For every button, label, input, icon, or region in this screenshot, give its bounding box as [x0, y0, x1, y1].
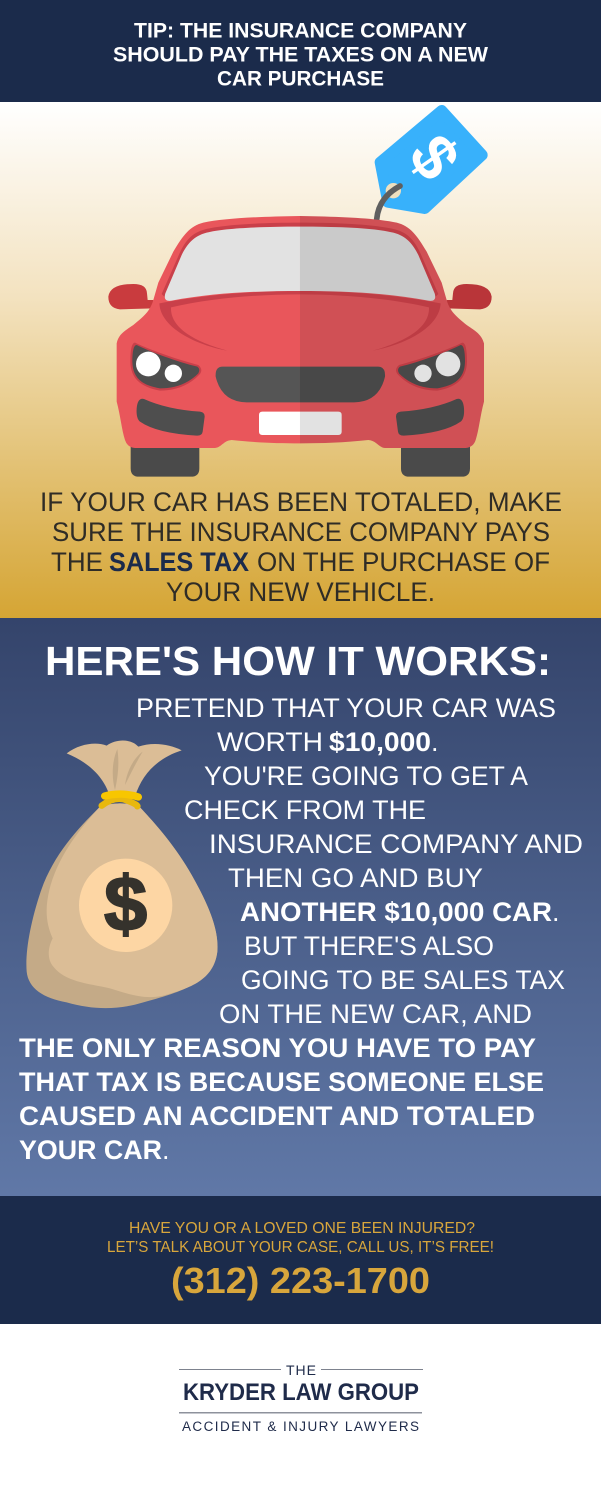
panel: sales tax tip	[0, 102, 601, 618]
icon: right wheel	[401, 443, 470, 477]
text block: sales tax tip	[40, 487, 562, 607]
right mirror	[447, 284, 492, 309]
text block: how it works explanation: .	[552, 897, 560, 927]
text block: how it works explanation: THEN GO AND BUY	[228, 863, 483, 893]
logo: The Kryder Law Group: ACCIDENT & INJURY LAWYERS	[182, 1419, 419, 1434]
left mirror	[108, 284, 153, 309]
text block: how it works explanation: CHECK FROM THE	[184, 795, 426, 825]
text block: how it works explanation: ON THE NEW CAR, AND	[219, 999, 532, 1029]
text block: how it works explanation: THE ONLY REASON YOU HAVE TO PAY	[19, 1033, 536, 1063]
panel: title banner	[0, 0, 601, 102]
text block: how it works explanation: THAT TAX IS BECAUSE SOMEONE ELSE	[19, 1067, 544, 1097]
phone number: (312) 223-1700	[171, 1260, 430, 1301]
text block: how it works explanation	[19, 693, 583, 1165]
text block: how it works explanation: CAUSED AN ACCIDENT AND TOTALED	[19, 1101, 535, 1131]
text block: how it works explanation: BUT THERE'S ALSO	[244, 931, 494, 961]
text block: sales tax tip: SALES TAX	[109, 547, 249, 577]
text block: how it works explanation: .	[162, 1135, 170, 1165]
text block: sales tax tip: THE	[51, 547, 103, 577]
text block: sales tax tip: YOUR NEW VEHICLE.	[166, 577, 435, 607]
icon: left wheel	[131, 443, 199, 477]
panel: how it works	[0, 618, 601, 1196]
text block: how it works explanation: YOU'RE GOING TO GET A	[204, 761, 528, 791]
title: SHOULD PAY THE TAXES ON A NEW	[113, 44, 488, 66]
icon: price tag: $	[395, 122, 474, 192]
call to action text: LET’S TALK ABOUT YOUR CASE, CALL US, IT’S FREE!	[107, 1239, 494, 1256]
panel: call to action	[0, 1196, 601, 1324]
icon: money bag	[26, 741, 218, 1008]
car right half	[300, 216, 484, 448]
text block: how it works explanation: $10,000	[329, 727, 431, 757]
icon: price tag	[377, 111, 482, 219]
heading: HERE'S HOW IT WORKS:	[45, 638, 551, 684]
text block: sales tax tip: IF YOUR CAR HAS BEEN TOTALED, MAKE	[40, 487, 562, 517]
logo: The Kryder Law Group	[179, 1362, 423, 1434]
car left half	[117, 216, 300, 448]
text block: how it works explanation: INSURANCE COMPANY AND	[209, 829, 583, 859]
call to action text	[107, 1220, 494, 1256]
logo: The Kryder Law Group: KRYDER LAW GROUP	[183, 1379, 419, 1406]
text block: sales tax tip: SURE THE INSURANCE COMPANY PAYS	[52, 517, 550, 547]
text block: how it works explanation: ANOTHER $10,000 CAR	[240, 897, 552, 927]
text block: how it works explanation: PRETEND THAT YOUR CAR WAS	[136, 693, 556, 723]
title: CAR PURCHASE	[217, 68, 384, 90]
text block: how it works explanation: YOUR CAR	[19, 1135, 162, 1165]
text block: how it works explanation: GOING TO BE SALES TAX	[241, 965, 565, 995]
illustration: red car with price tag	[108, 111, 492, 477]
title: TIP: THE INSURANCE COMPANY	[134, 20, 467, 42]
text block: how it works explanation: .	[431, 727, 439, 757]
icon: money bag: $	[104, 862, 147, 948]
logo: The Kryder Law Group: THE	[286, 1362, 316, 1378]
title	[113, 20, 488, 90]
text block: sales tax tip: ON THE PURCHASE OF	[257, 547, 550, 577]
text block: how it works explanation: WORTH	[217, 727, 323, 757]
call to action text: HAVE YOU OR A LOVED ONE BEEN INJURED?	[129, 1220, 475, 1237]
